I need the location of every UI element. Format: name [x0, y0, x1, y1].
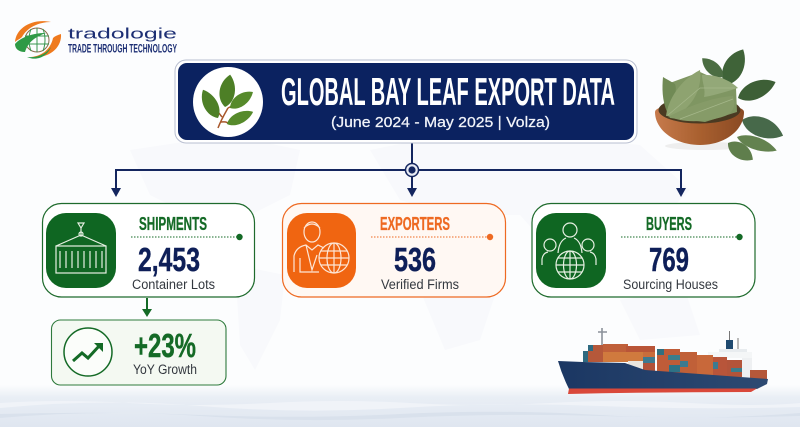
- arrow: to buyers: [676, 188, 686, 197]
- bridge superstructure: [708, 331, 752, 378]
- red waterline: [568, 388, 757, 394]
- panel: shipments: [42, 204, 254, 297]
- arrow: to exporters: [407, 188, 417, 197]
- title panel: [175, 60, 637, 143]
- divider with dot: [131, 234, 243, 240]
- connector lines: [116, 142, 681, 190]
- exporters heading: EXPORTERS: [380, 214, 450, 234]
- shipments label: Container Lots: [132, 277, 215, 292]
- connector node: [406, 164, 418, 176]
- fresh leaves: [698, 45, 787, 166]
- icon: buyers around globe: [536, 213, 606, 288]
- icon: exporter with globe: [287, 213, 356, 288]
- divider with dot: [371, 234, 493, 240]
- icon: shipping container: [46, 213, 116, 288]
- icon: bay leaf sprig: [193, 67, 263, 137]
- arrow: shipments to growth: [142, 298, 152, 317]
- divider with dot: [621, 234, 743, 240]
- dried leaves: [662, 70, 738, 122]
- panel: buyers: [532, 204, 755, 297]
- cargo ship: [558, 328, 768, 394]
- logo: [15, 21, 177, 59]
- buyers heading: BUYERS: [646, 214, 692, 234]
- bowl: [655, 103, 744, 145]
- subtitle: (June 2024 - May 2025 | Volza): [331, 115, 550, 131]
- logo wordmark: tradologie: [68, 26, 177, 42]
- sea: [0, 385, 800, 427]
- logo globe mark: [15, 21, 61, 59]
- arrow: to shipments: [111, 188, 121, 197]
- buyers label: Sourcing Houses: [623, 277, 718, 292]
- buyers value: 769: [649, 241, 689, 278]
- exporters label: Verified Firms: [381, 277, 459, 292]
- world map watermark: [130, 130, 700, 370]
- shipments heading: SHIPMENTS: [139, 214, 207, 234]
- panel: exporters: [282, 204, 506, 297]
- hull: [558, 361, 768, 389]
- icon: growth arrow: [64, 328, 112, 376]
- growth label: YoY Growth: [133, 362, 197, 377]
- exporters value: 536: [394, 241, 436, 278]
- container stacks: [583, 344, 767, 379]
- shipments value: 2,453: [138, 241, 200, 278]
- growth value: +23%: [134, 327, 196, 364]
- panel: yoy growth: [52, 320, 226, 385]
- bowl of bay leaves: [655, 45, 787, 166]
- logo tagline: TRADE THROUGH TECHNOLOGY: [68, 44, 177, 56]
- mast: [598, 328, 607, 362]
